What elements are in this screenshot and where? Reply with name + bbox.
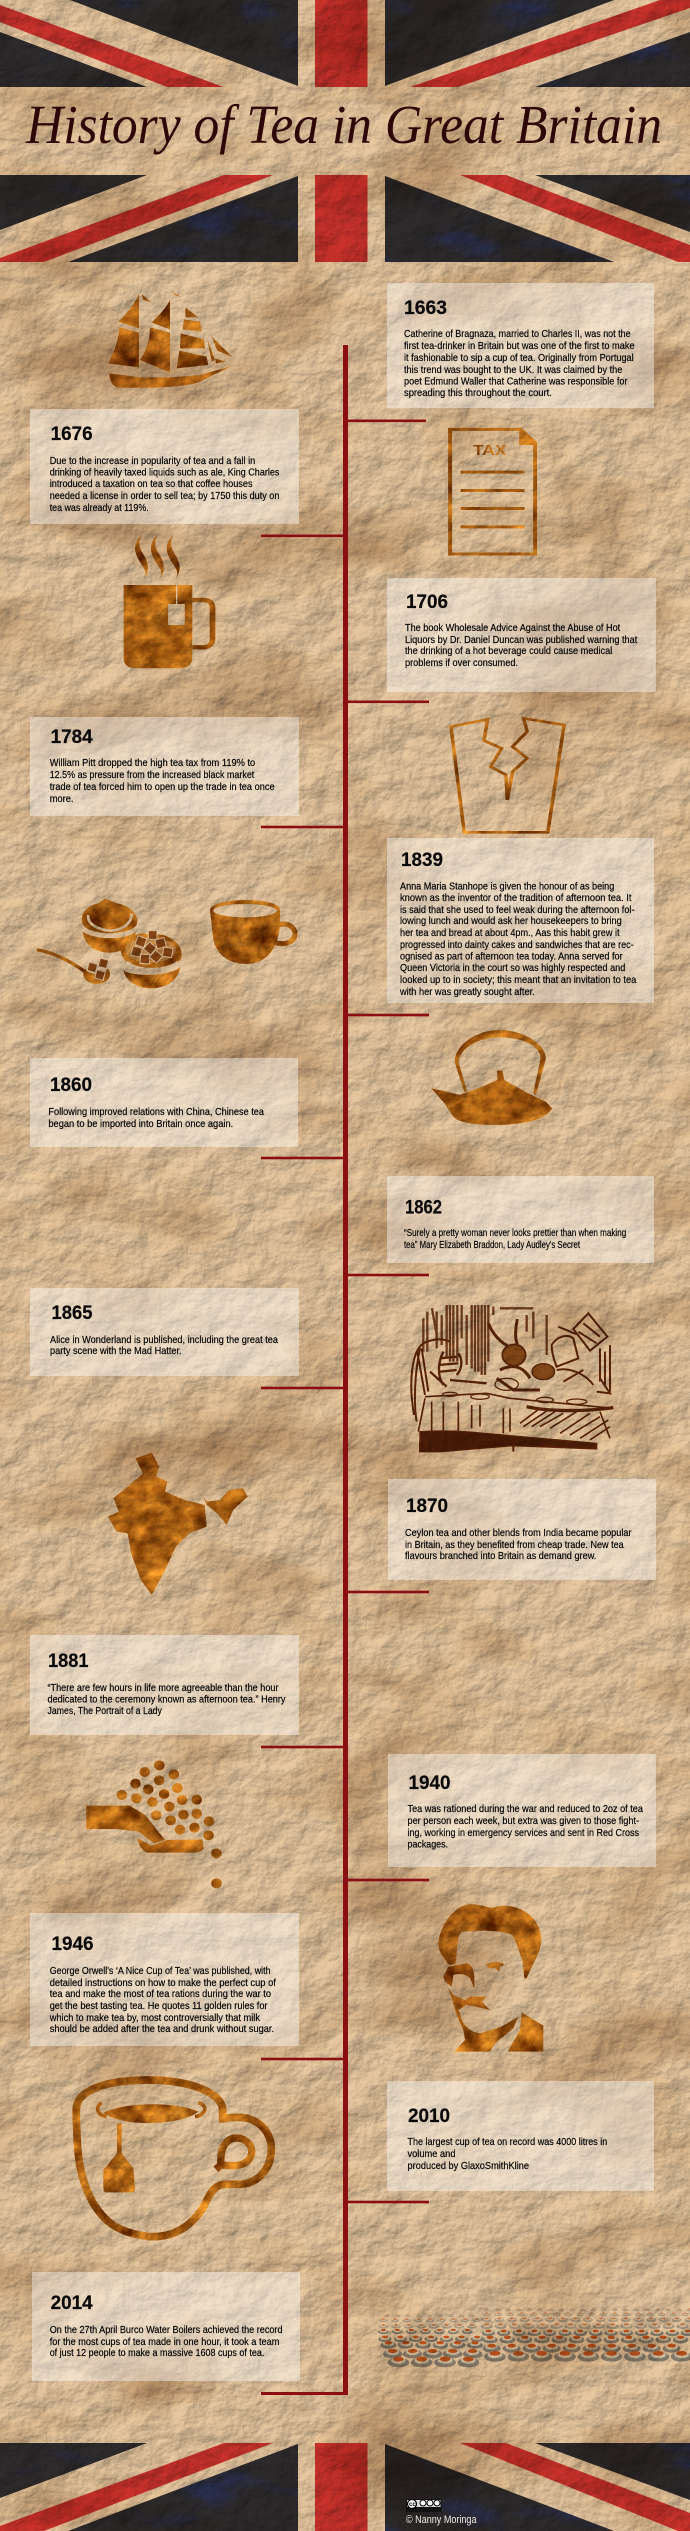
text: 1862: “Surely a pretty woman never looks prettier than when making	[404, 1227, 626, 1239]
near rows	[383, 2330, 690, 2362]
text: 1839: Anna Maria Stanhope is given the honour of as being	[400, 880, 614, 892]
heading: 1946: 1946	[52, 1934, 94, 1955]
icon: map of India	[108, 1453, 248, 1595]
hand	[86, 1806, 204, 1853]
creative commons badge: cc	[409, 2502, 416, 2508]
heading: 1865: 1865	[52, 1303, 93, 1324]
creative commons badge	[406, 2500, 441, 2512]
text: 1706: The book Wholesale Advice Against the Abuse of Hot	[405, 622, 620, 634]
text: 1860: began to be imported into Britain once again.	[48, 1118, 233, 1130]
text: 2010: produced by GlaxoSmithKline	[408, 2160, 529, 2172]
text: 1940	[408, 1803, 643, 1850]
text: 2010: volume and	[408, 2148, 456, 2160]
icon: large teacup with tea bag	[76, 2080, 271, 2237]
far rows	[383, 2309, 690, 2326]
text: 1663	[404, 328, 635, 399]
sugar bowls, spoon and cup silhouettes	[38, 898, 295, 988]
panel: 2010	[387, 2081, 654, 2191]
cup opening and bowl highlights	[84, 904, 277, 974]
text: 1706: the drinking of a hot beverage could cause medical	[405, 645, 612, 657]
icon: tax document: TAX	[473, 441, 507, 458]
panel: 1860	[30, 1058, 298, 1147]
text: 1940: ing, working in emergency services and sent in Red Cross	[408, 1827, 639, 1839]
heading: 1860: 1860	[50, 1075, 92, 1096]
text: 1865: party scene with the Mad Hatter.	[50, 1345, 182, 1357]
text: 2014	[50, 2324, 283, 2359]
icon: teapot	[431, 1030, 552, 1125]
title: History of Tea in Great Britain	[25, 94, 662, 155]
panel: 1706	[387, 578, 656, 692]
text: 1676: introduced a taxation on tea so that coffee houses	[50, 478, 253, 490]
panel: 1862	[387, 1176, 654, 1263]
text: 1839: her tea and bread at about 4pm., Aas this habit grew it	[400, 927, 620, 939]
text: 2010	[408, 2136, 607, 2172]
text: 1946: which to make tea by, most controversially that milk	[49, 2012, 261, 2024]
lower title flag band	[0, 175, 690, 262]
text: 1940: packages.	[408, 1838, 448, 1850]
panel: 2014	[32, 2272, 300, 2381]
text: 1706: Liquors by Dr. Daniel Duncan was published warning that	[405, 634, 637, 646]
heading: 1881: 1881	[48, 1651, 89, 1672]
text: 2014: for the most cups of tea made in one hour, it took a team	[50, 2336, 280, 2348]
text: 1784	[50, 757, 275, 805]
text: 1663: spreading this throughout the court.	[404, 387, 552, 399]
text: 1860	[48, 1106, 264, 1130]
text: 1784: trade of tea forced him to open up the trade in tea once	[50, 781, 275, 793]
text: 1663: first tea-drinker in Britain but was one of the first to make	[404, 340, 635, 352]
text: 1676: needed a license in order to sell tea; by 1750 this duty on	[50, 490, 280, 502]
text: 1870: in Britain, as they benefited from cheap trade. New tea	[405, 1539, 624, 1551]
text: 1839: with her was greatly sought after.	[399, 986, 535, 998]
icon: hand scattering tea leaves	[86, 1760, 222, 1888]
text: 1663: Catherine of Bragnaza, married to Charles II, was not the	[404, 328, 631, 340]
sugar cubes	[87, 931, 173, 980]
text: 1663: poet Edmund Waller that Catherine was responsible for	[404, 376, 628, 388]
icon: broken cup outline	[451, 718, 564, 832]
text: 1860: Following improved relations with China, Chinese tea	[48, 1106, 264, 1118]
text: 1881: James, The Portrait of a Lady	[48, 1705, 163, 1717]
text: 1663: this trend was bought to the UK. It was claimed by the	[404, 364, 622, 376]
top flag band	[0, 0, 690, 87]
text: 1870: flavours branched into Britain as demand grew.	[405, 1550, 596, 1562]
text: 1940: per person each week, but extra was given to those fight-	[408, 1815, 639, 1827]
text: 1839: Queen Victoria in the court so was highly respected and	[400, 962, 625, 974]
text: 1676: drinking of heavily taxed liquids such as ale, King Charles	[50, 466, 279, 478]
icon: George Orwell portrait	[438, 1904, 543, 2052]
heading: 1784: 1784	[51, 727, 93, 748]
panel: 1881	[30, 1635, 299, 1735]
mug body and steam	[124, 535, 213, 668]
panel: 1940	[388, 1754, 656, 1867]
text: 1946: George Orwell's ‘A Nice Cup of Tea’ was published, with	[50, 1965, 271, 1977]
text: 1784: more.	[50, 793, 74, 805]
heading: 1663: 1663	[404, 298, 447, 319]
panel: 1865	[30, 1288, 299, 1376]
text: 1946: detailed instructions on how to make the perfect cup of	[50, 1977, 276, 1989]
text: 1940: Tea was rationed during the war and reduced to 2oz of tea	[408, 1803, 643, 1815]
text: 1839: looked up to in society; this meant that an invitation to tea	[400, 974, 636, 986]
text: 1881: dedicated to the ceremony known as afternoon tea.” Henry	[48, 1694, 286, 1706]
heading: 1839: 1839	[401, 850, 443, 871]
text: 1784: 12.5% as pressure from the increased black market	[50, 769, 254, 781]
bottom flag band	[0, 2443, 690, 2531]
heading: 1940: 1940	[408, 1773, 450, 1794]
text: 1946: get the best tasting tea. He quotes 11 golden rules for	[50, 2000, 268, 2012]
tea bag tag	[168, 585, 185, 625]
text: 1839: is said that she used to feel weak during the afternoon fol-	[400, 904, 635, 916]
icon: sugar bowls, spoon and teacup	[38, 898, 295, 988]
tea leaves	[117, 1760, 222, 1888]
heading: 1676: 1676	[51, 424, 93, 445]
heading: 1862: 1862	[405, 1198, 442, 1218]
text: 2014: of just 12 people to make a massive 1608 cups of tea.	[50, 2347, 264, 2359]
text: 1865	[50, 1334, 278, 1357]
text: 1676	[50, 455, 280, 514]
illustration: Mad Hatter tea party engraving	[411, 1305, 613, 1452]
panel: 1663	[387, 283, 654, 408]
text: 1706	[405, 622, 637, 669]
text: 1663: it fashionable to sip a cup of tea. Originally from Portugal	[404, 352, 634, 364]
text: 1881: “There are few hours in life more agreeable than the hour	[48, 1682, 279, 1694]
text: 1839: known as the inventor of the tradition of afternoon tea. It	[400, 892, 632, 904]
text: 2014: On the 27th April Burco Water Boilers achieved the record	[50, 2324, 283, 2336]
heading: 1706: 1706	[406, 592, 448, 613]
text: 1870: Ceylon tea and other blends from India became popular	[405, 1527, 632, 1539]
illustration: rows of teacups	[383, 2309, 690, 2362]
panel: 1870	[388, 1479, 656, 1580]
icon: sailing ship	[108, 292, 233, 388]
text: 1676: tea was already at 119%.	[50, 502, 149, 514]
text: 1946	[49, 1965, 276, 2035]
panel: 1946	[30, 1913, 299, 2046]
heading: 2014: 2014	[51, 2293, 93, 2314]
panel: 1676	[30, 409, 299, 524]
credit: © Nanny Moringa	[406, 2514, 477, 2526]
text: 2010: The largest cup of tea on record was 4000 litres in	[408, 2136, 607, 2148]
text: 1839: lowing lunch and would ask her housekeepers to bring	[400, 915, 622, 927]
icon: tax document	[450, 428, 536, 554]
text: 1839: progressed into dainty cakes and sandwiches that are rec-	[400, 939, 634, 951]
text: 1839	[399, 880, 636, 998]
timeline	[261, 345, 429, 2395]
text: 1881	[48, 1682, 286, 1717]
text: 1839: ognised as part of afternoon tea today. Anna served for	[400, 950, 623, 962]
text: 1946: should be added after the tea and drunk without sugar.	[50, 2023, 274, 2035]
heading: 1870: 1870	[406, 1496, 448, 1517]
text: 1870	[405, 1527, 632, 1562]
icon: mug with tea bag and steam	[124, 535, 213, 668]
panel: 1784	[30, 717, 299, 816]
text: 1676: Due to the increase in popularity of tea and a fall in	[50, 455, 255, 467]
text: 1862	[404, 1227, 626, 1251]
text: 1862: tea” Mary Elizabeth Braddon, Lady Audley's Secret	[404, 1239, 580, 1251]
text: 1865: Alice in Wonderland is published, including the great tea	[50, 1334, 278, 1346]
text: 1706: problems if over consumed.	[405, 657, 518, 669]
panel: 1839	[387, 838, 654, 1003]
text: 1946: tea and make the most of tea rations during the war to	[50, 1988, 271, 2000]
heading: 2010: 2010	[408, 2106, 450, 2127]
text: 1784: William Pitt dropped the high tea tax from 119% to	[50, 757, 255, 769]
